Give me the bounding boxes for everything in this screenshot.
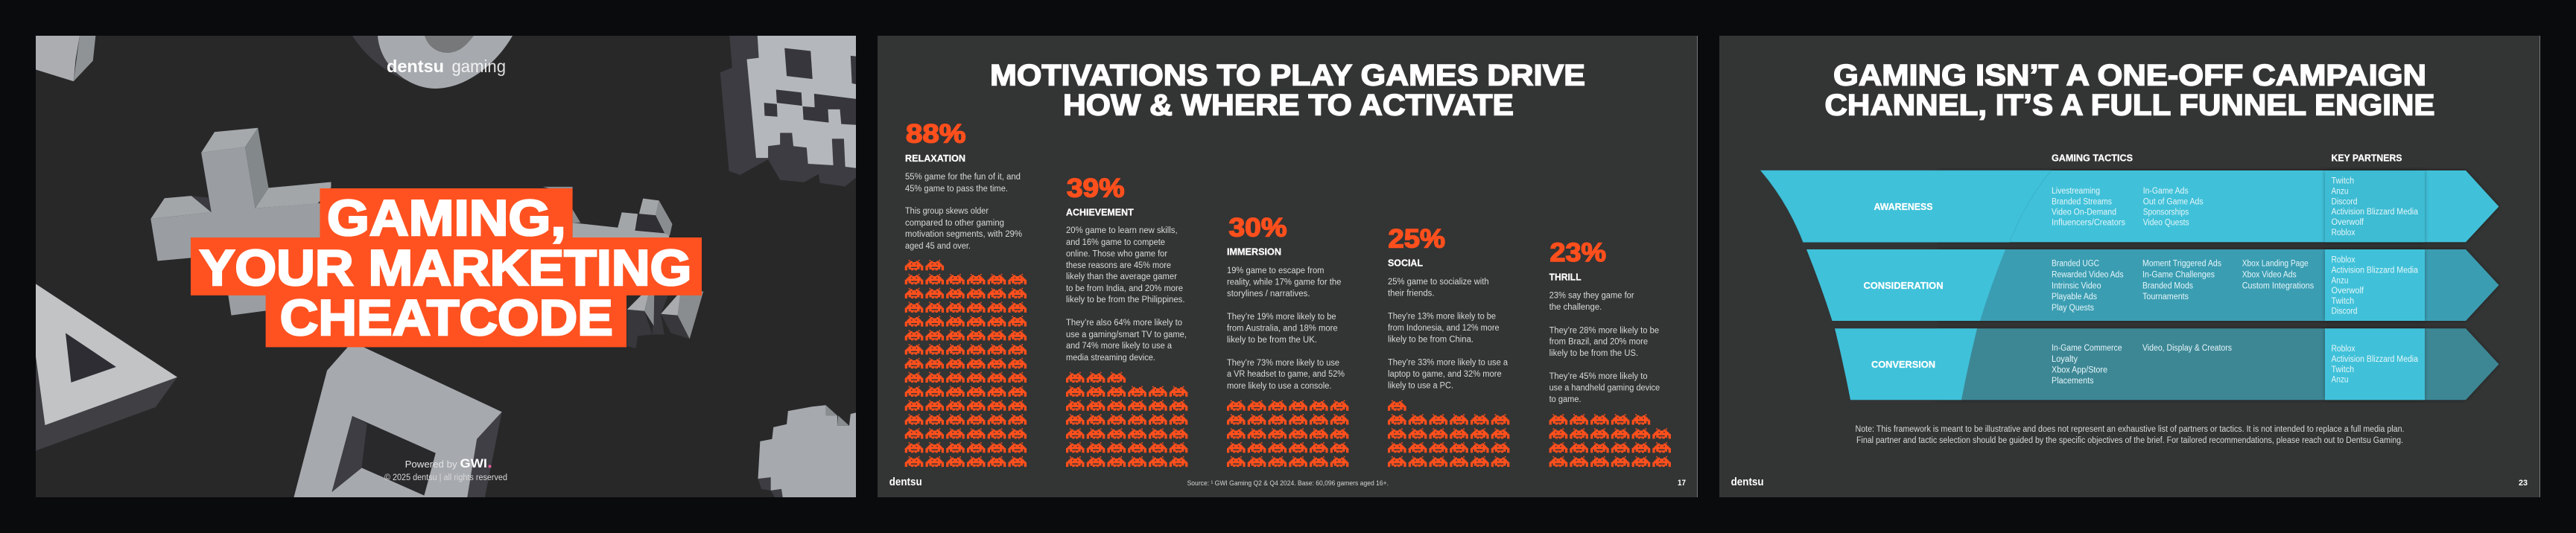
framework note bbox=[1855, 425, 2405, 445]
column: immersion: 19% game to escape from bbox=[1227, 266, 1325, 275]
framework note: Note: This framework is meant to be illustrative and does not represent an exhaustive list of partners or tactics. It is not intended to replace a full media plan. bbox=[1855, 425, 2405, 434]
tactics: awareness: Branded Streams bbox=[2052, 197, 2112, 206]
tactics: awareness bbox=[2052, 187, 2204, 228]
logo: dentsu gaming: dentsu bbox=[387, 57, 444, 76]
column: achievement: 20% game to learn new skills, bbox=[1066, 226, 1178, 235]
row: conversion bbox=[1835, 328, 2499, 400]
column: immersion: storylines / narratives. bbox=[1227, 290, 1310, 299]
column: relaxation: This group skews older bbox=[905, 207, 989, 216]
tactics: awareness: Sponsorships bbox=[2143, 208, 2189, 217]
tactics: awareness: Video Quests bbox=[2143, 219, 2189, 228]
column: thrill: the challenge. bbox=[1549, 303, 1602, 312]
concrete game shapes bbox=[36, 36, 857, 497]
copyright: © 2025 dentsu | all rights reserved bbox=[384, 473, 507, 482]
partners: awareness: Twitch bbox=[2332, 177, 2354, 186]
column: relaxation: 55% game for the fun of it, and bbox=[905, 173, 1021, 182]
label: consideration: CONSIDERATION bbox=[1864, 280, 1943, 291]
tactics: awareness: Out of Game Ads bbox=[2143, 197, 2204, 206]
motivations title: HOW & WHERE TO ACTIVATE bbox=[1063, 89, 1514, 122]
column: immersion bbox=[1227, 213, 1348, 467]
column: immersion: a VR headset to game, and 52% bbox=[1227, 370, 1345, 379]
column: achievement: these reasons are 45% more bbox=[1066, 261, 1171, 270]
column: thrill: 23% say they game for bbox=[1549, 292, 1634, 301]
column: immersion: They’re 73% more likely to use bbox=[1227, 359, 1339, 368]
row: consideration bbox=[1806, 249, 2499, 321]
column: social: SOCIAL bbox=[1388, 258, 1423, 269]
label: awareness: AWARENESS bbox=[1874, 201, 1933, 212]
funnel title: GAMING ISN’T A ONE-OFF CAMPAIGN bbox=[1833, 60, 2426, 92]
column: achievement: ACHIEVEMENT bbox=[1066, 206, 1134, 217]
column: immersion: from Australia, and 18% more bbox=[1227, 324, 1338, 333]
partners: awareness: Overwolf bbox=[2332, 218, 2364, 227]
column: social: their friends. bbox=[1388, 289, 1435, 298]
column: social bbox=[1388, 225, 1509, 467]
tactics: consideration: Xbox Landing Page bbox=[2242, 259, 2309, 268]
tactics: consideration: Custom Integrations bbox=[2242, 281, 2314, 290]
partners: awareness: Roblox bbox=[2332, 229, 2355, 237]
source note: Source: ¹ GWI Gaming Q2 & Q4 2024. Base: 60,096 gamers aged 16+. bbox=[1187, 479, 1389, 488]
column: thrill bbox=[1549, 238, 1671, 467]
partners: conversion: Roblox bbox=[2332, 345, 2355, 354]
column header: key partners: KEY PARTNERS bbox=[2332, 153, 2402, 164]
column: thrill: They’re 28% more likely to be bbox=[1549, 326, 1659, 335]
footer logo: dentsu bbox=[1731, 476, 1764, 488]
column: social: likely to be from China. bbox=[1388, 335, 1473, 344]
powered by GWI: Powered by bbox=[405, 459, 457, 470]
invader chart: 39% bbox=[1066, 372, 1187, 467]
column: achievement: online. Those who game for bbox=[1066, 250, 1167, 259]
column: relaxation: compared to other gaming bbox=[905, 219, 1004, 228]
column: achievement: and 16% game to compete bbox=[1066, 238, 1165, 247]
partners: conversion: Anzu bbox=[2332, 376, 2348, 385]
column: relaxation: motivation segments, with 29% bbox=[905, 230, 1022, 239]
column: immersion: IMMERSION bbox=[1227, 246, 1281, 258]
column: thrill: to game. bbox=[1549, 395, 1582, 404]
column: immersion: reality, while 17% game for the bbox=[1227, 278, 1341, 287]
column: immersion: likely to be from the UK. bbox=[1227, 336, 1317, 345]
cover title: YOUR MARKETING bbox=[200, 240, 691, 296]
partners: consideration: Activision Blizzard Media bbox=[2332, 266, 2419, 275]
column: social: 25% bbox=[1389, 225, 1445, 253]
tactics: consideration: Intrinsic Video bbox=[2052, 281, 2101, 290]
tactics: consideration: Xbox Video Ads bbox=[2242, 271, 2297, 280]
column: achievement: and 74% more likely to use a bbox=[1066, 342, 1173, 351]
invader chart: 88% bbox=[905, 260, 1027, 467]
tactics: conversion: Loyalty bbox=[2052, 355, 2078, 364]
partners: conversion: Twitch bbox=[2332, 366, 2354, 374]
partners: consideration: Discord bbox=[2332, 307, 2357, 316]
motivations title bbox=[990, 60, 1585, 122]
column: thrill: THRILL bbox=[1549, 272, 1582, 283]
tactics: awareness: Influencers/Creators bbox=[2052, 219, 2125, 228]
shape: pixel orb bbox=[758, 405, 857, 497]
column: achievement: They’re also 64% more likely to bbox=[1066, 319, 1182, 328]
panel: motivations slide bbox=[878, 36, 1698, 497]
footer logo: dentsu bbox=[889, 476, 922, 488]
tactics: awareness: Video On-Demand bbox=[2052, 208, 2116, 217]
panel: funnel slide bbox=[1719, 36, 2540, 497]
tactics: consideration: In-Game Challenges bbox=[2142, 271, 2215, 280]
column: achievement: 39% bbox=[1067, 174, 1125, 202]
partners: consideration: Anzu bbox=[2332, 276, 2348, 285]
invader chart: 30% bbox=[1227, 400, 1348, 467]
column: thrill: from Brazil, and 20% more bbox=[1549, 338, 1648, 347]
shape: d-pad bbox=[150, 128, 331, 316]
partners: consideration: Twitch bbox=[2332, 297, 2354, 306]
partners: awareness: Anzu bbox=[2332, 188, 2348, 197]
partners: conversion bbox=[2325, 328, 2425, 400]
funnel title bbox=[1825, 60, 2434, 122]
motivations title: MOTIVATIONS TO PLAY GAMES DRIVE bbox=[990, 60, 1585, 92]
column: immersion: They’re 19% more likely to be bbox=[1227, 313, 1336, 322]
column: social: laptop to game, and 32% more bbox=[1388, 370, 1502, 379]
partners: awareness bbox=[2325, 170, 2425, 242]
column: achievement: to be from India, and 20% more bbox=[1066, 284, 1183, 293]
shape: d-pad right pieces bbox=[543, 187, 703, 348]
column: social: likely to use a PC. bbox=[1388, 382, 1453, 391]
tactics: awareness: Livestreaming bbox=[2052, 187, 2100, 196]
page number: 23 bbox=[2519, 479, 2528, 488]
tactics: consideration: Tournaments bbox=[2142, 293, 2189, 301]
column: relaxation bbox=[905, 119, 1027, 467]
partners: awareness: Discord bbox=[2332, 198, 2357, 207]
shape: triangle bbox=[36, 284, 177, 451]
tactics: awareness: In-Game Ads bbox=[2143, 187, 2189, 196]
partners: consideration: Overwolf bbox=[2332, 287, 2364, 296]
partners: awareness: Activision Blizzard Media bbox=[2332, 208, 2419, 217]
tactics: consideration: Playable Ads bbox=[2052, 293, 2097, 301]
shape: pixel ghost bbox=[720, 36, 857, 186]
column: social: from Indonesia, and 12% more bbox=[1388, 324, 1500, 333]
label: conversion: CONVERSION bbox=[1871, 359, 1935, 370]
tactics: consideration: Rewarded Video Ads bbox=[2052, 271, 2124, 280]
powered by GWI bbox=[405, 456, 492, 470]
column: immersion: 30% bbox=[1229, 213, 1287, 243]
partners: consideration: Roblox bbox=[2332, 256, 2355, 265]
logo: dentsu gaming bbox=[387, 57, 506, 76]
tactics: consideration: Play Quests bbox=[2052, 304, 2094, 313]
column: social: They’re 13% more likely to be bbox=[1388, 313, 1496, 322]
column: relaxation: RELAXATION bbox=[905, 153, 965, 164]
logo: dentsu gaming: gaming bbox=[451, 57, 506, 76]
column: relaxation: 88% bbox=[906, 119, 965, 149]
column: thrill: likely to be from the US. bbox=[1549, 349, 1638, 358]
framework note: Final partner and tactic selection should be guided by the specific objectives of the brief. For tailored recommendations, please reach out to Dentsu Gaming. bbox=[1856, 436, 2403, 445]
funnel title: CHANNEL, IT’S A FULL FUNNEL ENGINE bbox=[1825, 89, 2434, 122]
funnel stage: consideration bbox=[1806, 249, 2005, 321]
powered by GWI: GWI bbox=[460, 456, 487, 470]
shape: corner block bbox=[36, 36, 95, 81]
column: achievement: use a gaming/smart TV to game, bbox=[1066, 331, 1187, 339]
column: relaxation: 45% game to pass the time. bbox=[905, 185, 1008, 194]
shape: ring at top bbox=[352, 36, 513, 89]
column: thrill: 23% bbox=[1549, 238, 1606, 267]
column: thrill: They’re 45% more likely to bbox=[1549, 372, 1648, 381]
column header: gaming tactics: GAMING TACTICS bbox=[2052, 153, 2133, 164]
column: social: 25% game to socialize with bbox=[1388, 278, 1489, 287]
cover title: GAMING, bbox=[327, 190, 566, 246]
column: immersion: more likely to use a console. bbox=[1227, 382, 1332, 391]
tactics: conversion: Placements bbox=[2052, 377, 2094, 386]
funnel stage: awareness bbox=[1761, 170, 2052, 242]
tactics: consideration: Branded Mods bbox=[2142, 281, 2193, 290]
page number: 17 bbox=[1678, 479, 1686, 488]
column: relaxation: aged 45 and over. bbox=[905, 242, 971, 251]
partners: conversion: Activision Blizzard Media bbox=[2332, 355, 2419, 364]
invader chart: 25% bbox=[1388, 400, 1509, 467]
column: achievement: media streaming device. bbox=[1066, 354, 1155, 363]
cover title bbox=[191, 188, 702, 347]
partners: consideration bbox=[2325, 249, 2425, 321]
column: thrill: use a handheld gaming device bbox=[1549, 384, 1660, 393]
column: achievement: likely than the average gamer bbox=[1066, 272, 1177, 281]
funnel stage: conversion bbox=[1835, 328, 1977, 400]
tactics: consideration bbox=[2052, 259, 2314, 313]
row: awareness bbox=[1761, 170, 2499, 242]
column: achievement: likely to be from the Philippines. bbox=[1066, 296, 1184, 304]
tactics: conversion bbox=[2052, 344, 2232, 386]
tactics: conversion: Xbox App/Store bbox=[2052, 366, 2107, 375]
invader chart: 23% bbox=[1549, 414, 1671, 467]
tactics: consideration: Moment Triggered Ads bbox=[2142, 259, 2221, 268]
column: social: They’re 33% more likely to use a bbox=[1388, 359, 1509, 368]
tactics: conversion: Video, Display & Creators bbox=[2142, 344, 2232, 353]
tactics: consideration: Branded UGC bbox=[2052, 259, 2099, 268]
panel: cover slide bbox=[36, 36, 857, 497]
tactics: conversion: In-Game Commerce bbox=[2052, 344, 2122, 353]
column: achievement bbox=[1066, 174, 1187, 467]
shape: square outline bbox=[294, 342, 502, 497]
cover title: CHEATCODE bbox=[280, 290, 613, 346]
